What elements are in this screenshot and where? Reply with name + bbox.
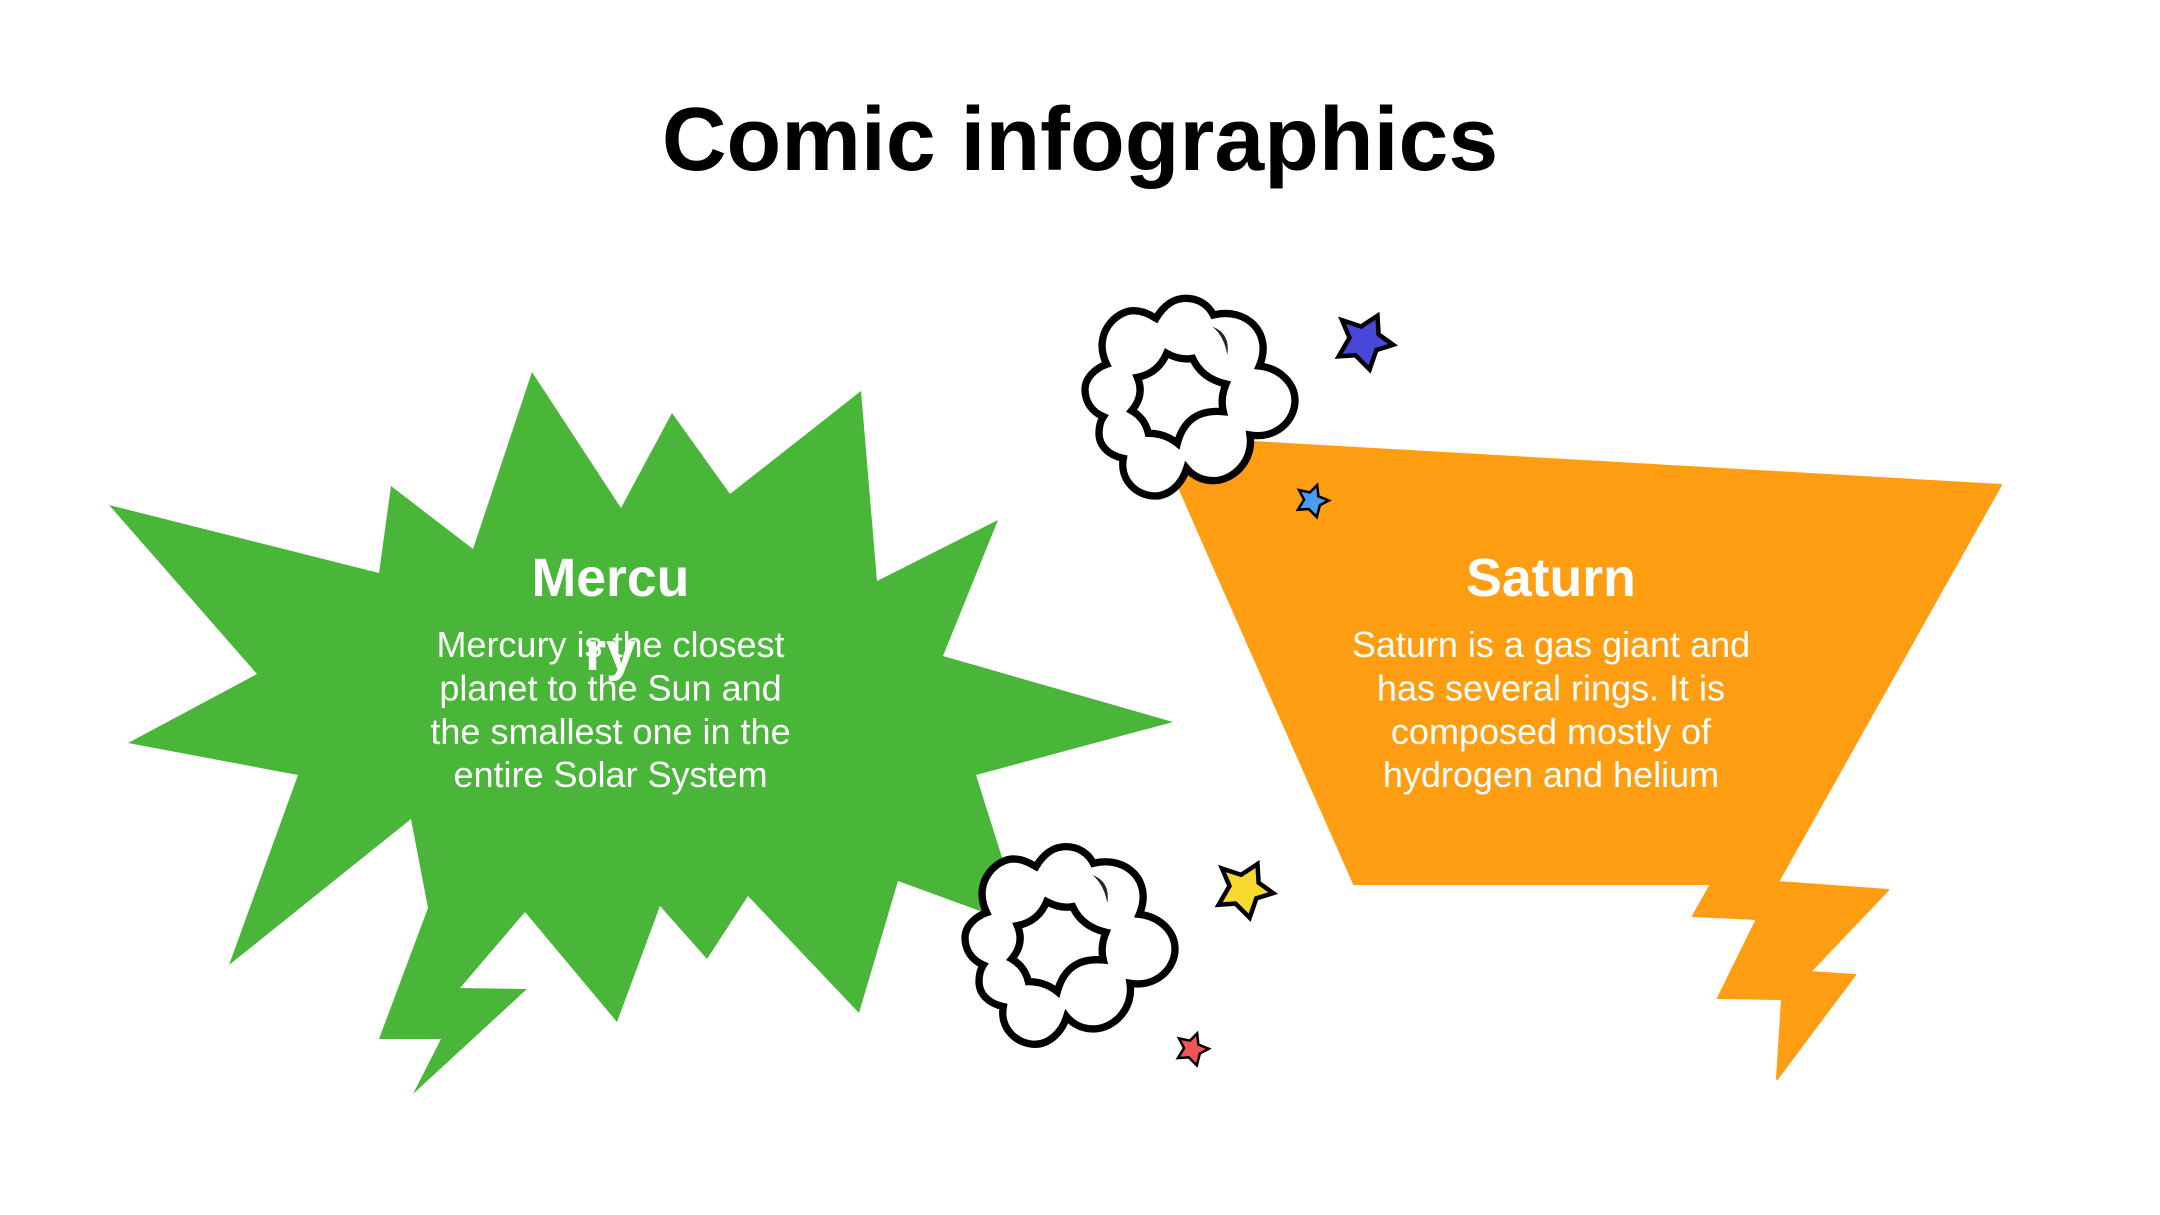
title: Comic infographics	[662, 89, 1498, 189]
icon: red star	[1178, 1033, 1209, 1065]
Mercury heading: ry	[585, 622, 636, 682]
icon: light blue star	[1298, 485, 1329, 517]
panel: Saturn speech shape	[1157, 437, 2001, 1079]
icon: explosion cloud bottom	[965, 847, 1175, 1044]
Saturn body text: composed mostly of	[1391, 711, 1712, 752]
panel: Mercury burst	[109, 372, 1173, 1094]
icon: dark blue star	[1339, 316, 1393, 369]
icon: yellow star	[1219, 864, 1273, 918]
Saturn body text: hydrogen and helium	[1383, 754, 1719, 795]
Saturn heading: Saturn	[1466, 548, 1636, 608]
icon: explosion cloud top	[1085, 298, 1295, 496]
Saturn body text: has several rings. It is	[1377, 668, 1725, 708]
Mercury body text: entire Solar System	[453, 754, 768, 795]
Mercury body text: the smallest one in the	[430, 711, 791, 752]
Mercury heading: Mercu	[532, 548, 689, 608]
Mercury body text: planet to the Sun and	[439, 668, 782, 708]
Mercury body text: Mercury is the closest	[436, 624, 785, 665]
Saturn body text: Saturn is a gas giant and	[1352, 624, 1750, 665]
